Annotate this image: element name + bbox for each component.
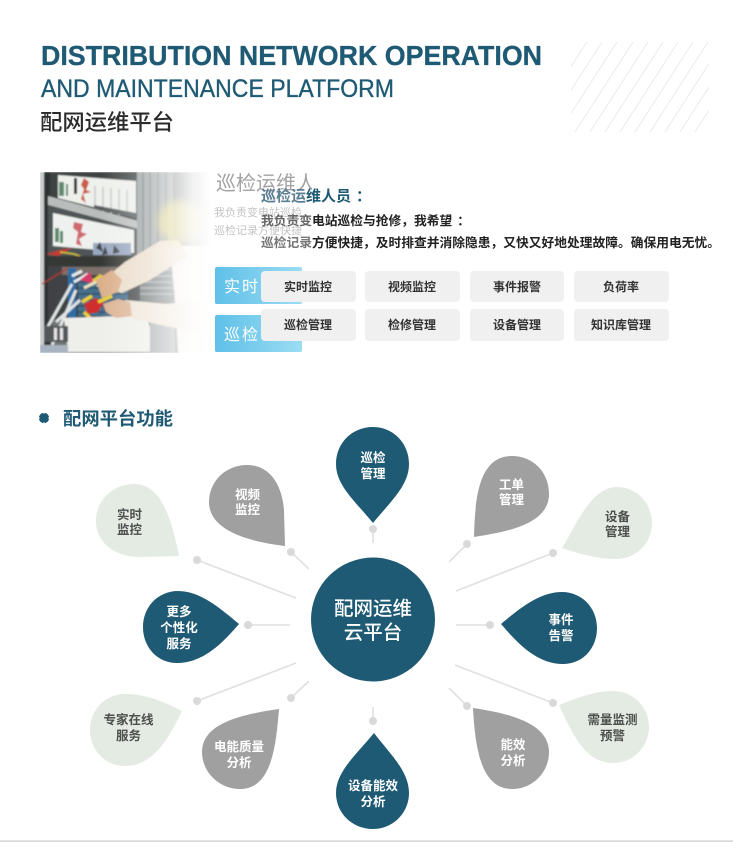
ghost button 1: 实时: [224, 278, 260, 296]
drop: 事件告警: 事件: [548, 612, 574, 627]
hub: 配网运维云平台: 配网运维: [334, 598, 412, 620]
drop: 事件告警: 告警: [548, 628, 574, 643]
icon: bullet: [38, 412, 50, 424]
button: 知识库管理: 知识库管理: [591, 317, 651, 332]
title line 2: AND MAINTENANCE PLATFORM: [41, 75, 394, 103]
drop: 实时监控: [96, 484, 179, 557]
drop: 设备管理: 管理: [605, 524, 630, 539]
ghost panel behind the text: 巡检记录方便快捷: [214, 223, 302, 237]
drop: 需量监测预警: [559, 691, 649, 763]
drop: 工单管理: [474, 456, 549, 537]
drop: 视频监控: [209, 465, 285, 546]
drop: 电能质量分析: [202, 709, 279, 789]
ghost button 2: 巡检: [224, 326, 260, 344]
title line 1: DISTRIBUTION NETWORK OPERATION: [41, 40, 542, 71]
button: 视频监控: 视频监控: [388, 279, 436, 294]
drop: 实时监控: 监控: [117, 522, 142, 537]
drop: 专家在线服务: 专家在线: [103, 712, 154, 727]
connector lines: [193, 525, 557, 725]
button: 实时监控: [261, 271, 356, 302]
button: 设备管理: [470, 309, 564, 341]
section heading: [38, 408, 173, 429]
drop: 巡检管理: 管理: [360, 466, 386, 481]
ghost button 2: [215, 315, 302, 352]
button: 实时监控: 实时监控: [284, 279, 332, 294]
ghost panel behind the text: [214, 173, 312, 352]
hub: 配网运维云平台: [311, 558, 435, 682]
button: 检修管理: 检修管理: [388, 317, 436, 332]
button: 设备管理: 设备管理: [493, 317, 541, 332]
drop: 专家在线服务: [90, 694, 182, 766]
drop: 巡检管理: 巡检: [360, 450, 386, 465]
drop: 更多个性化服务: 个性化: [160, 620, 198, 635]
drop: 工单管理: 管理: [499, 492, 524, 507]
drop: 视频监控: 监控: [235, 502, 260, 517]
drop: 更多个性化服务: 更多: [166, 604, 192, 619]
button: 巡检管理: 巡检管理: [284, 317, 332, 332]
button: 负荷率: [574, 271, 669, 302]
role line 2: 巡检记录方便快捷，及时排查并消除隐患，又快又好地处理故障。确保用电无忧。: [261, 235, 720, 250]
role line 1: 我负责变电站巡检与抢修，我希望 ：: [261, 213, 470, 228]
button: 事件报警: 事件报警: [493, 279, 541, 294]
drop: 更多个性化服务: [143, 591, 239, 663]
drop: 能效分析: 分析: [500, 753, 526, 768]
role description: [261, 187, 720, 250]
button: 知识库管理: [574, 309, 669, 341]
drop: 专家在线服务: 服务: [116, 728, 141, 743]
drop: 设备能效分析: 分析: [360, 794, 386, 809]
title: [40, 40, 542, 135]
button: 负荷率: 负荷率: [603, 279, 639, 294]
drop: 工单管理: 工单: [499, 477, 524, 492]
drop: 设备能效分析: [336, 733, 409, 829]
button: 事件报警: [470, 271, 564, 302]
ghost heading: 巡检运维人员: [216, 172, 336, 195]
drop: 电能质量分析: 分析: [226, 755, 252, 770]
button: 视频监控: [365, 271, 460, 302]
drop: 巡检管理: [336, 427, 409, 523]
title line 3: 配网运维平台: [40, 110, 174, 135]
drop: 事件告警: [501, 592, 597, 664]
drop: 能效分析: 能效: [500, 737, 526, 752]
role heading: 巡检运维人员 ：: [261, 187, 371, 205]
ghost button 1: [215, 267, 302, 304]
drop: 设备能效分析: 设备能效: [348, 778, 398, 793]
button: 巡检管理: [261, 309, 356, 341]
button: 检修管理: [365, 309, 460, 341]
ghost body text: 我负责变电站巡检: [214, 205, 302, 219]
hub: 配网运维云平台: 云平台: [344, 622, 402, 644]
feature buttons: [261, 271, 669, 341]
heading text: 配网平台功能: [63, 408, 173, 429]
drop: 设备管理: [562, 487, 652, 559]
drop: 需量监测预警: 预警: [600, 728, 625, 743]
drop: 实时监控: 实时: [117, 507, 142, 522]
drop: 电能质量分析: 电能质量: [214, 739, 264, 754]
drop: 更多个性化服务: 服务: [166, 636, 192, 651]
drop: 需量监测预警: 需量监测: [587, 712, 638, 727]
drop: 能效分析: [473, 708, 549, 789]
photo: technician at a cabinet: [40, 172, 200, 353]
drop: 视频监控: 视频: [235, 487, 260, 502]
drop: 设备管理: 设备: [605, 509, 630, 524]
